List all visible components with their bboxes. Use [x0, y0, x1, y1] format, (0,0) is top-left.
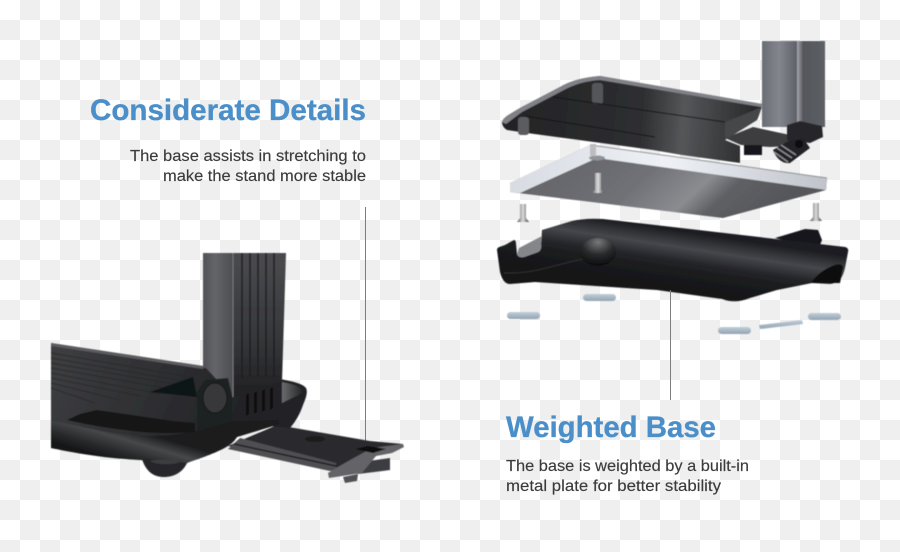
base body — [51, 343, 282, 477]
description: left: The base assists in stretching to — [130, 148, 366, 165]
exploded view: weighted base — [497, 41, 848, 334]
corner foot recess — [811, 264, 843, 283]
heading: Weighted Base: Weighted Base — [506, 411, 716, 444]
description: left: make the stand more stable — [163, 168, 366, 185]
description: right: metal plate for better stability — [506, 478, 721, 495]
screws — [517, 173, 822, 222]
foot pads — [507, 294, 841, 334]
right cup of base — [270, 379, 307, 428]
weighted base body — [497, 219, 848, 301]
cup recess — [580, 238, 616, 266]
top shell underside — [502, 76, 762, 163]
leader line: left — [365, 207, 366, 442]
description: right: The base is weighted by a built-in — [506, 458, 749, 475]
vent slots — [246, 387, 273, 416]
pull-out tray — [228, 425, 404, 483]
leader line: right — [670, 290, 671, 400]
description: right — [506, 458, 749, 495]
description: left — [130, 148, 366, 185]
heading: Considerate Details: Considerate Details — [90, 94, 366, 127]
metal plate — [510, 144, 827, 218]
upright arm — [762, 41, 825, 127]
hinge with round cap — [197, 378, 232, 432]
support arm — [203, 253, 286, 397]
hinge and gear — [725, 121, 823, 163]
rear hinge behind base — [775, 229, 822, 245]
product photo: base with pull-out support — [51, 253, 404, 483]
